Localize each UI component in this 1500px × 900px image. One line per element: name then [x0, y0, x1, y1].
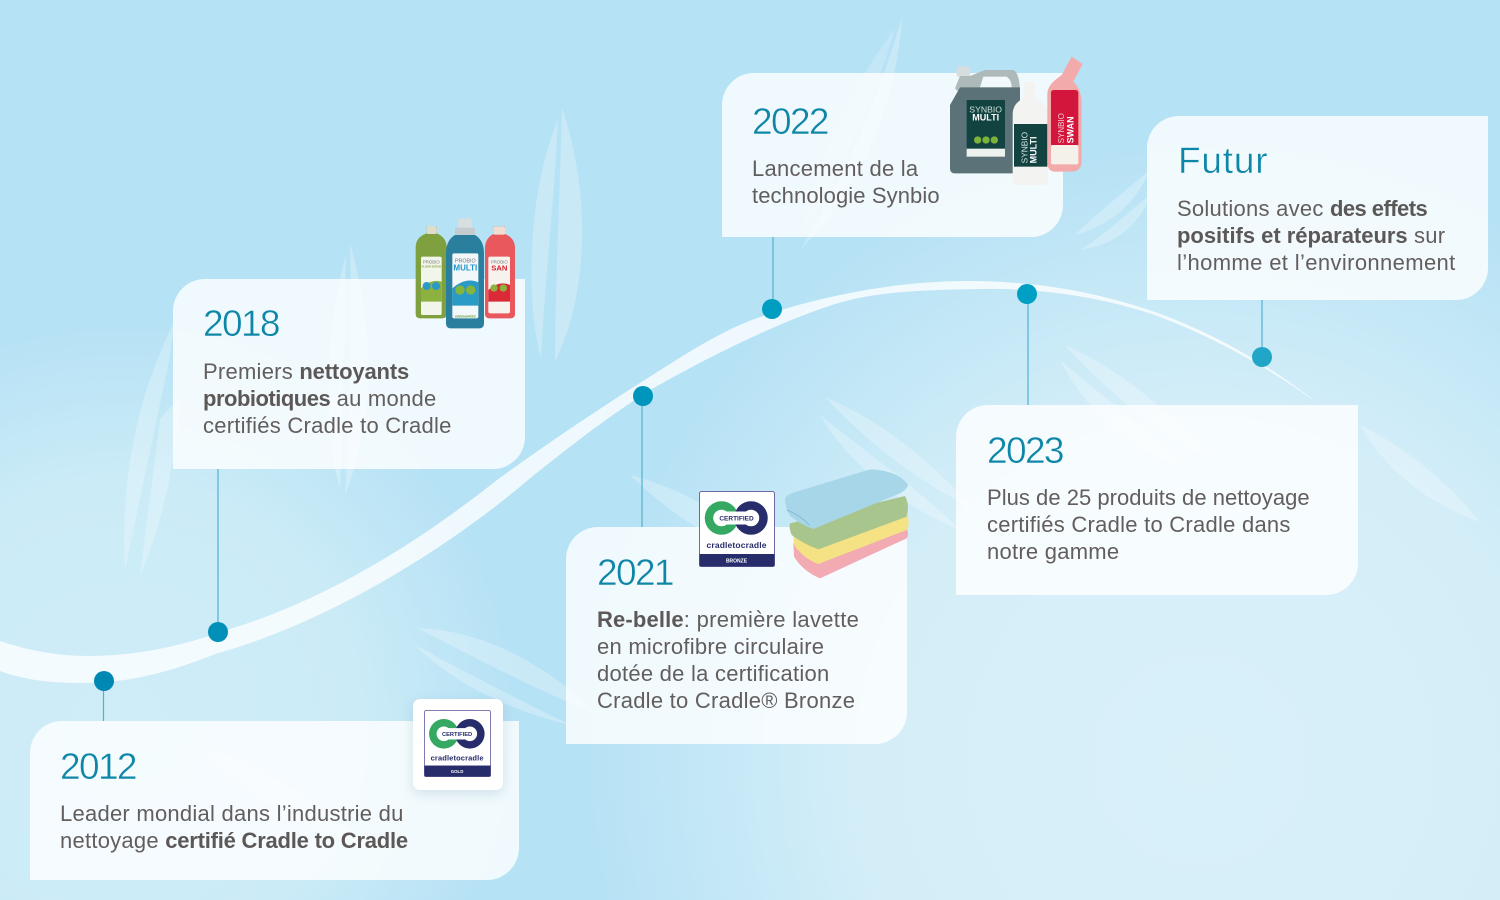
icon: Probio bottles: SAN — [491, 264, 508, 273]
icon: Synbio bottles: SYNBIO — [1019, 131, 1029, 163]
year Futur: Futur — [1178, 140, 1268, 181]
icon: Synbio bottles: SYNBIO — [969, 104, 1002, 114]
text 2012 — [60, 801, 408, 853]
icon: Cradle to Cradle gold badge — [413, 699, 503, 790]
text 2021: dotée de la certification — [597, 661, 830, 686]
year 2021: 2021 — [597, 552, 673, 593]
icon: Probio bottles: PROBIO — [491, 259, 508, 264]
text 2022 — [752, 156, 940, 208]
text 2022: Lancement de la — [752, 156, 918, 181]
text 2021 — [597, 607, 859, 713]
text 2018: probiotiques au monde — [203, 386, 436, 411]
panel: 2023 — [956, 405, 1358, 595]
icon: Probio bottles: FLOOR SCRUB — [422, 264, 441, 268]
icon: Synbio bottles: MULTI — [1029, 137, 1039, 163]
text Futur — [1177, 196, 1456, 275]
text 2018 — [203, 359, 452, 438]
text 2023: notre gamme — [987, 539, 1119, 564]
text 2023: certifiés Cradle to Cradle dans — [987, 512, 1291, 537]
text 2012: Leader mondial dans l’industrie du — [60, 801, 404, 826]
panel: Futur — [1147, 116, 1488, 300]
text 2012: nettoyage certifié Cradle to Cradle — [60, 828, 408, 853]
panel: 2012 — [30, 721, 519, 880]
icon: Synbio bottles: SYNBIO — [1057, 113, 1066, 143]
icon: Cradle to Cradle bronze badge: CERTIFIED — [719, 516, 754, 522]
icon: Cradle to Cradle gold badge: CERTIFIED — [442, 732, 472, 738]
text 2021: en microfibre circulaire — [597, 634, 824, 659]
text 2021: Re-belle: première lavette — [597, 607, 859, 632]
icon: Cradle to Cradle bronze badge — [699, 491, 775, 567]
icon: Synbio bottles: MULTI — [972, 113, 999, 123]
text 2022: technologie Synbio — [752, 183, 940, 208]
icon: Probio bottles — [416, 218, 515, 328]
icon: Cradle to Cradle gold badge: cradletocradle — [431, 753, 484, 762]
icon: Cradle to Cradle bronze badge: cradletocradle — [706, 540, 767, 550]
icon: microfibre cloths — [785, 469, 909, 578]
panel: 2022 — [722, 73, 1063, 237]
timeline dots — [94, 284, 1272, 691]
year 2023: 2023 — [987, 430, 1063, 471]
icon: Cradle to Cradle gold badge: GOLD — [451, 769, 463, 774]
panel: 2018 — [173, 279, 525, 469]
text 2021: Cradle to Cradle® Bronze — [597, 688, 855, 713]
icon: Probio bottles: PROBIO — [423, 259, 440, 264]
year 2018: 2018 — [203, 303, 279, 344]
connector lines — [104, 237, 1262, 721]
year 2012: 2012 — [60, 746, 136, 787]
panel: 2021 — [566, 527, 907, 744]
text Futur: Solutions avec des effets — [1177, 196, 1427, 221]
text 2023: Plus de 25 produits de nettoyage — [987, 485, 1310, 510]
icon: Probio bottles: MULTI — [453, 264, 477, 273]
icon: Probio bottles: GREENSPEED — [455, 315, 477, 319]
text 2018: Premiers nettoyants — [203, 359, 409, 384]
icon: Cradle to Cradle bronze badge: BRONZE — [726, 558, 748, 564]
curve — [0, 281, 1320, 683]
year 2022: 2022 — [752, 101, 828, 142]
text 2018: certifiés Cradle to Cradle — [203, 413, 452, 438]
icon: Probio bottles: PROBIO — [455, 259, 476, 265]
text Futur: l’homme et l’environnement — [1177, 250, 1456, 275]
text 2023 — [987, 485, 1310, 564]
icon: Synbio bottles — [950, 56, 1082, 185]
icon: Synbio bottles: SWAN — [1065, 116, 1075, 143]
text Futur: positifs et réparateurs sur — [1177, 223, 1445, 248]
